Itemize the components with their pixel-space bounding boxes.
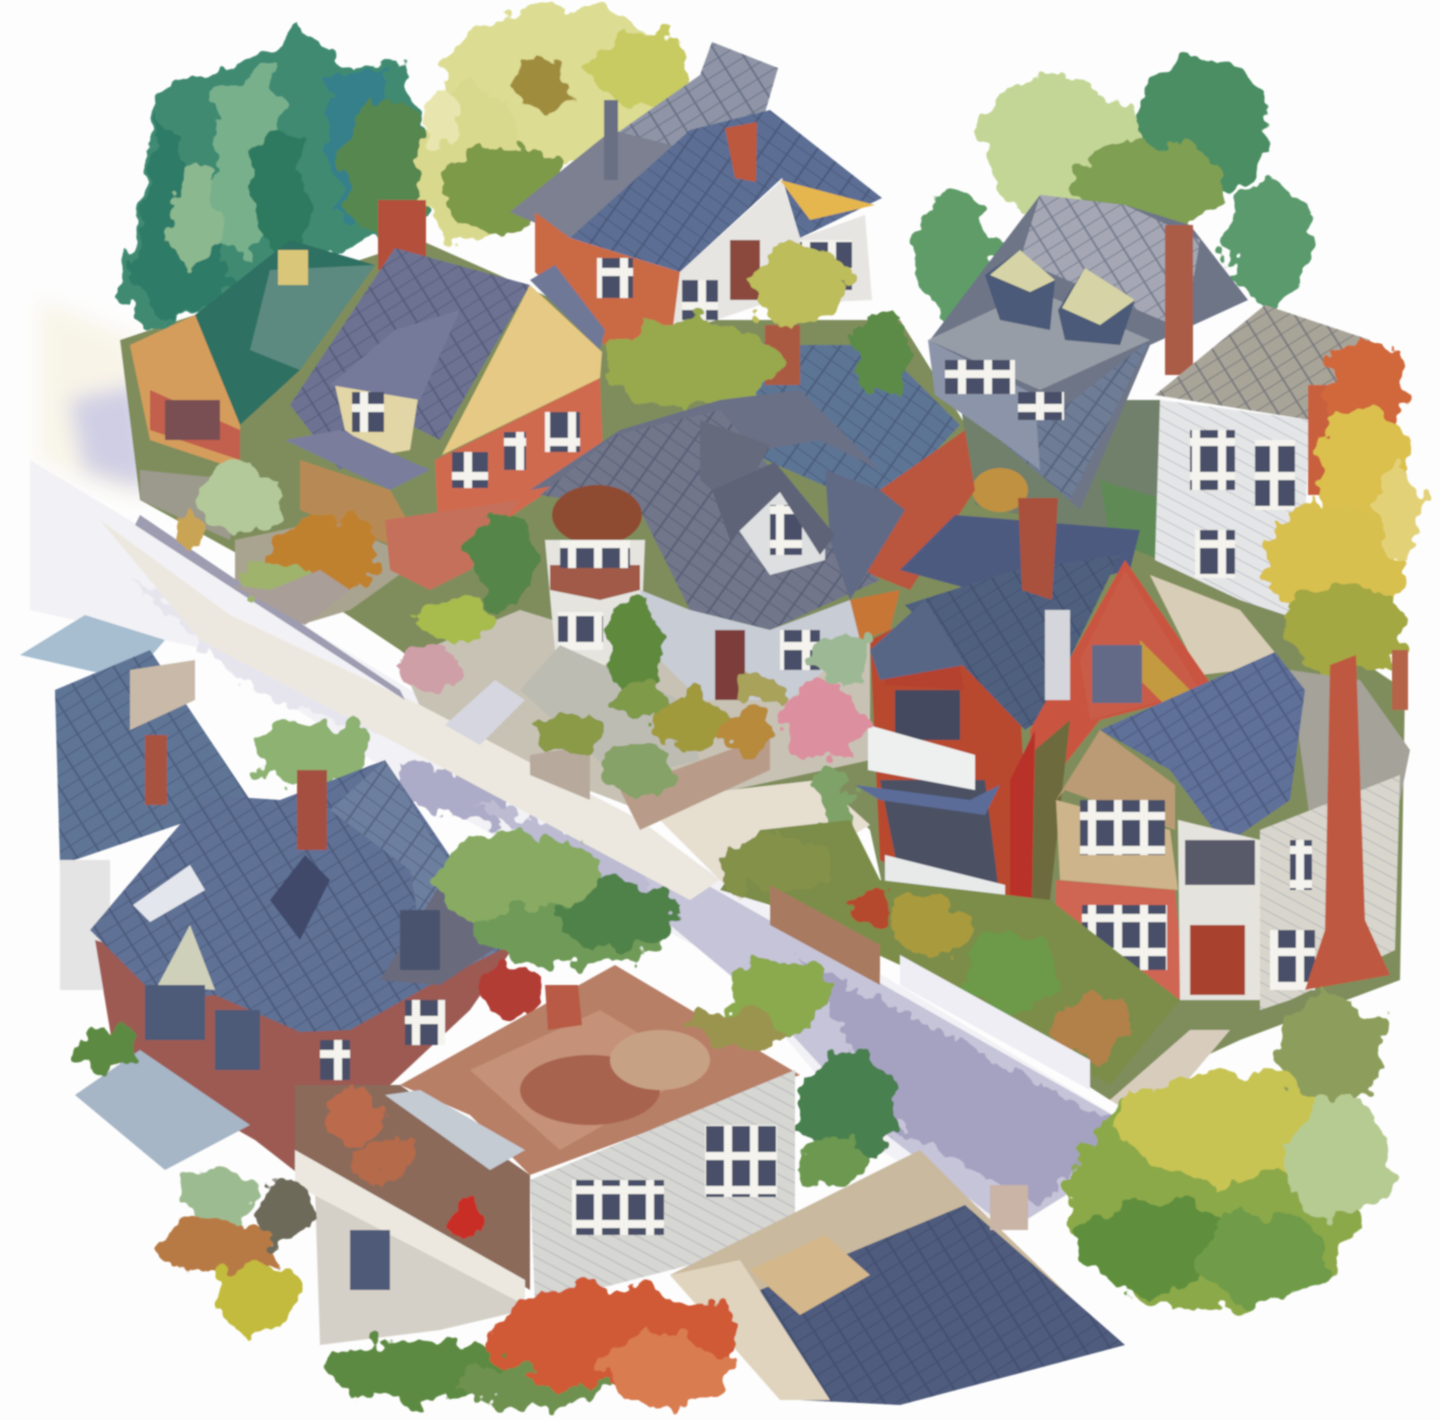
- lower wall: [640, 590, 860, 700]
- foliage: bottom red and green: [325, 1285, 735, 1407]
- trees: top right: [915, 60, 1312, 320]
- main roof: [905, 555, 1120, 730]
- gable: [442, 285, 602, 455]
- house: center back blue roof: [720, 325, 975, 590]
- porch: [285, 430, 430, 490]
- main roof: [540, 410, 880, 630]
- left gable: [1056, 730, 1175, 830]
- gable right: [380, 885, 500, 985]
- main roof: [90, 760, 510, 1032]
- bushes: left of center: [172, 465, 530, 642]
- sidewalks and curb: [100, 515, 870, 900]
- right wall: [530, 1070, 795, 1305]
- vent pipe: [1045, 610, 1070, 700]
- turret: [545, 540, 645, 670]
- balcony: [295, 1150, 525, 1305]
- tall chimney: [1305, 655, 1390, 990]
- tree: center street: [730, 955, 900, 1185]
- side awning: [75, 1050, 250, 1170]
- tree: bottom right: [1070, 995, 1395, 1310]
- right roof light: [1290, 670, 1410, 820]
- dormers: [985, 250, 1055, 330]
- red wall: [435, 378, 603, 570]
- garden: center beds and stairs: [400, 600, 870, 840]
- left wall lower: [315, 1190, 525, 1345]
- street road surface: [30, 300, 1130, 1230]
- blue main roof: [1100, 652, 1305, 845]
- upper balcony wall: [295, 1085, 530, 1290]
- chimneys: [297, 770, 327, 850]
- back roof: [530, 390, 880, 490]
- balcony plants and flat roof planter: [327, 1010, 783, 1235]
- skylight: [133, 865, 205, 922]
- upper roof: [600, 42, 778, 190]
- house: lower left blue roof: [60, 735, 515, 1175]
- awning: [385, 1090, 525, 1170]
- tan wall: [1056, 800, 1178, 890]
- far left roof: [20, 615, 250, 865]
- roof: [290, 248, 530, 470]
- bushes: center behind flat roof: [77, 830, 680, 1072]
- chimney: [545, 985, 582, 1030]
- red wall: [1055, 880, 1185, 1000]
- house: top right grey: [928, 195, 1248, 510]
- yellow-green bushes: behind center house: [605, 245, 910, 410]
- planter: left: [232, 570, 350, 625]
- dormer: [335, 340, 420, 455]
- left roof: [510, 130, 690, 238]
- right roof: [825, 470, 905, 600]
- bush: behind blue roof house: [250, 720, 370, 790]
- chimney: [725, 122, 757, 182]
- house: white siding right: [1150, 305, 1370, 675]
- house: top center: [510, 42, 882, 345]
- trees: top left evergreens: [120, 30, 427, 330]
- dormer: [725, 470, 825, 575]
- right wall: [672, 180, 872, 335]
- back roof: [900, 515, 1140, 600]
- windows: [597, 258, 633, 298]
- main roof: [570, 110, 882, 272]
- house: bottom right roof: [670, 1150, 1125, 1405]
- dormer gable: [158, 925, 215, 990]
- porch: [1178, 820, 1260, 1000]
- wall: [870, 600, 1030, 905]
- balcony: [895, 690, 960, 740]
- right wall: [1260, 775, 1400, 1010]
- brick wall: [95, 940, 515, 1175]
- house: red with balconies: [855, 498, 1215, 905]
- left wall: [535, 212, 680, 345]
- roof: [400, 965, 800, 1175]
- flat porch roof: [928, 290, 1150, 390]
- scene underlay: dense block between houses: [120, 240, 1405, 1100]
- chimney: [1165, 225, 1193, 375]
- gable right: [1030, 560, 1215, 900]
- red column: [1010, 730, 1035, 905]
- house: right front: [1055, 650, 1410, 1010]
- chimney: [1018, 498, 1058, 600]
- house: yellow gable: [285, 200, 605, 590]
- bushes: lower left: [162, 1167, 309, 1332]
- trees: right autumn: [1265, 340, 1422, 675]
- windows: [145, 985, 205, 1040]
- tree: top center yellow green: [415, 5, 690, 243]
- house: left teal roof: [130, 240, 375, 540]
- garden: front of red house and fence: [720, 820, 1230, 1125]
- wall: [928, 340, 1040, 470]
- house: center grey: [530, 390, 905, 700]
- house: flat brown roof: [295, 965, 800, 1345]
- bay windows: [1080, 800, 1165, 855]
